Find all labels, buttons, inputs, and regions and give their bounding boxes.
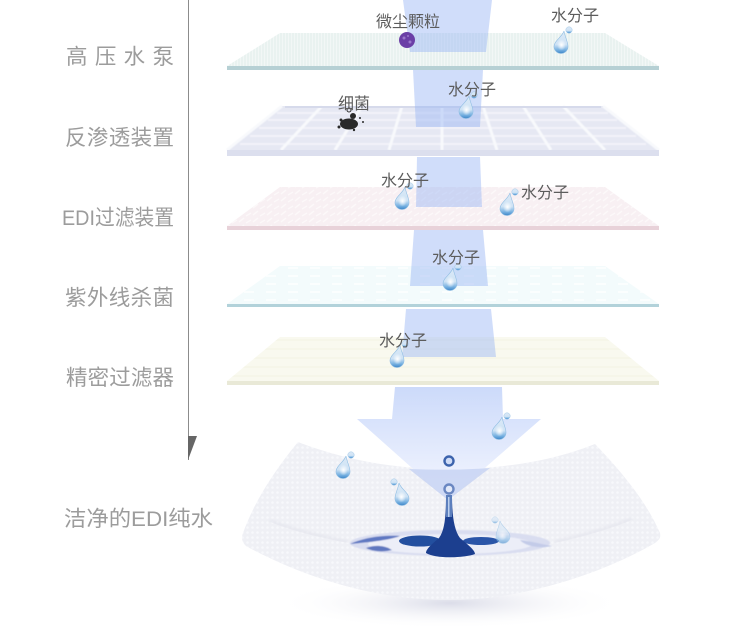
plate 2: reverse osmosis (227, 106, 659, 156)
flow line with arrow (188, 0, 197, 460)
step labels (62, 45, 213, 531)
label: precision filter: 精密过滤器 (66, 366, 174, 390)
fabric inner crease shadow (270, 519, 632, 542)
fabric front fold (246, 520, 656, 600)
label: clean EDI pure water: 洁净的EDI纯水 (64, 507, 213, 531)
water flow band segments (402, 0, 496, 357)
plate 1: high pressure pump (227, 33, 659, 70)
tag: water molecule 1: 水分子 (551, 7, 599, 25)
upper droplet ring (444, 456, 454, 466)
label: UV sterilization: 紫外线杀菌 (65, 286, 174, 310)
plate 3: EDI filter (227, 187, 659, 230)
lower droplet ring (444, 484, 454, 494)
water drops (336, 27, 572, 544)
tag: water molecule 5: 水分子 (432, 249, 480, 267)
tag: water molecule 3: 水分子 (381, 172, 429, 190)
tag: water molecule 4: 水分子 (521, 184, 569, 202)
purple dust particle (399, 32, 415, 48)
large arrow into fabric (357, 387, 541, 500)
plate 4: UV sterilization (227, 266, 659, 307)
dark water pools (399, 536, 441, 546)
label: reverse osmosis: 反渗透装置 (65, 126, 174, 150)
curved fabric sheet (242, 442, 660, 600)
ripples (350, 530, 552, 556)
tag: dust particles: 微尘颗粒 (376, 13, 440, 31)
tag: water molecule 2: 水分子 (448, 81, 496, 99)
shadow under fabric (275, 577, 625, 629)
bacteria cluster (338, 108, 364, 131)
tag: bacteria: 细菌 (338, 95, 370, 113)
tag: water molecule 6: 水分子 (379, 332, 427, 350)
label: EDI filter: EDI过滤装置 (62, 206, 174, 230)
splash base and column (426, 495, 475, 557)
water splash (350, 456, 552, 557)
plate 5: precision filter (227, 337, 659, 385)
label: high pressure pump: 高压水泵 (66, 45, 174, 69)
